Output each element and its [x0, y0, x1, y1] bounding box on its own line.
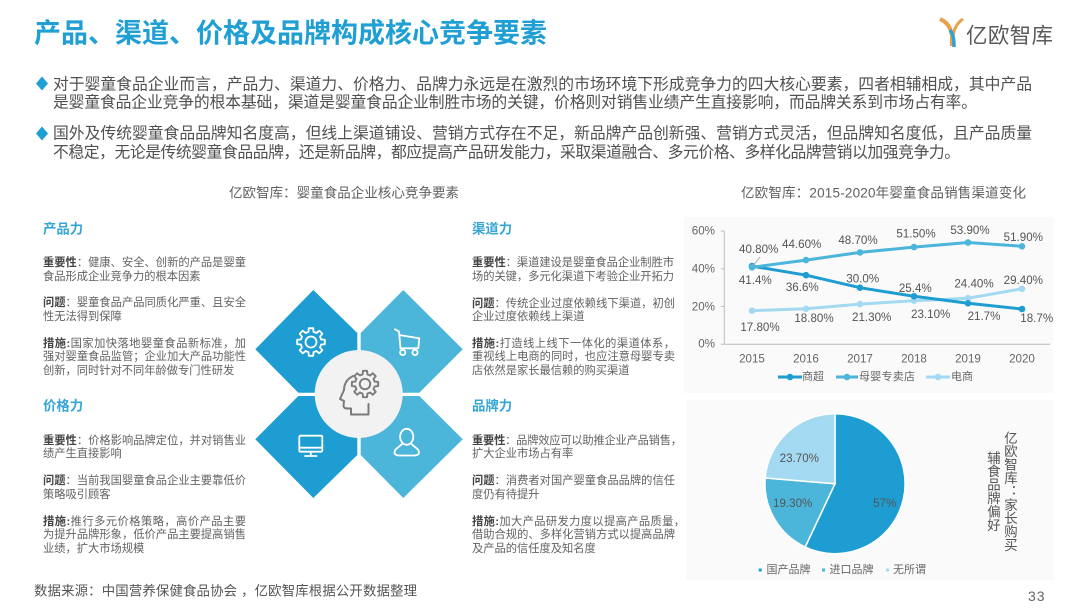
intro paragraph 2: 不稳定，无论是传统婴童食品品牌，还是新品牌，都应提高产品研发能力，采取渠道融合、多元价格、多样化品牌营销以加强竞争力。	[53, 142, 960, 162]
data labels: 51.50%	[896, 228, 936, 240]
icon: person	[394, 429, 419, 456]
x axis labels	[739, 352, 1035, 366]
panel: channel power: 店依然是家长最信赖的购买渠道	[472, 363, 630, 377]
pie legend	[759, 562, 926, 576]
panel: price power: 策略吸引顾客	[43, 487, 111, 501]
data labels: 36.6%	[786, 281, 819, 294]
icon: head with gear	[340, 371, 378, 414]
panel: price power: 绩产生直接影响	[43, 446, 122, 460]
logo	[940, 19, 1053, 48]
logo: 亿欧智库	[966, 24, 1053, 48]
pie chart: brand preference: 57%	[873, 497, 896, 510]
panel: product power: 食品形成企业竞争力的根本因素	[43, 269, 201, 283]
intro paragraph 1	[36, 74, 1032, 112]
data labels: 53.90%	[950, 224, 990, 237]
source note: 数据来源：中国营养保健食品协会 ，亿欧智库根据公开数据整理	[34, 582, 417, 598]
pie chart: brand preference: 19.30%	[773, 497, 812, 510]
y axis labels: 0%	[698, 338, 715, 350]
y axis labels: 60%	[692, 224, 715, 238]
page number: 33	[1028, 588, 1046, 604]
panel: brand power: 品牌力	[472, 398, 512, 414]
icon: shopping cart	[395, 329, 419, 355]
subheading: core factors: 亿欧智库：婴童食品企业核心竞争要素	[229, 184, 459, 200]
title: 产品、渠道、价格及品牌构成核心竞争要素	[34, 18, 547, 48]
x axis labels: 2017	[847, 352, 873, 366]
panel: product power: 措施:国家加快落地婴童食品新标准，加	[43, 336, 246, 350]
diamond: bottom left	[255, 396, 357, 498]
panel: product power: 创新，同时针对不同年龄做专门性研发	[43, 363, 234, 377]
intro paragraph 2	[36, 124, 1032, 162]
subheading: channel change: 亿欧智库：2015-2020年婴童食品销售渠道变化	[741, 184, 1026, 200]
data labels: 18.7%	[1020, 312, 1053, 325]
intro paragraph 1: 对于婴童食品企业而言，产品力、渠道力、价格力、品牌力永远是在激烈的市场环境下形成竞争力的四大核心要素，四者相辅相成，其中产品	[53, 74, 1032, 94]
panel: product power: 产品力	[43, 220, 83, 236]
icon: monitor	[299, 436, 322, 456]
panel: product power: 性无法得到保障	[43, 309, 122, 323]
panel: product power: 重要性：健康、安全、创新的产品是婴童	[43, 255, 246, 269]
intro paragraph 1: 是婴童食品企业竞争的根本基础，渠道是婴童食品企业制胜市场的关键，价格则对销售业绩产生直接影响，而品牌关系到市场占有率。	[53, 92, 977, 112]
data labels: 21.7%	[968, 310, 1000, 323]
x axis labels: 2019	[955, 352, 981, 366]
icon: gear	[297, 328, 325, 356]
panel: channel power: 重视线上电商的同时，也应注意母婴专卖	[472, 349, 675, 363]
data labels: 24.40%	[954, 278, 994, 290]
diamond diagram	[255, 290, 463, 498]
vertical caption: brand preference: 亿欧智库：家长购买	[1002, 431, 1017, 552]
diamond: top right	[361, 290, 463, 393]
line chart legend: 母婴专卖店	[859, 369, 915, 383]
panel: price power: 措施:推行多元价格策略，高价产品主要	[43, 514, 246, 528]
panel: product power	[43, 220, 246, 377]
pie legend: 国产品牌	[766, 562, 810, 576]
panel: product power: 问题：婴童食品产品同质化严重、且安全	[43, 295, 246, 309]
data labels: 48.70%	[838, 234, 878, 247]
x axis labels: 2016	[793, 352, 819, 366]
data labels: 29.40%	[1004, 274, 1043, 287]
vertical caption: brand preference: 辅食品牌偏好	[985, 451, 1000, 532]
data labels: 21.30%	[852, 311, 891, 324]
panel: price power: 问题：当前我国婴童食品企业主要靠低价	[43, 473, 246, 487]
data labels: 40.80%	[739, 243, 778, 256]
center circle	[315, 350, 403, 438]
data labels: 30.0%	[846, 272, 879, 286]
line chart: sales channel change	[684, 217, 1053, 393]
line chart legend	[778, 369, 973, 383]
panel: price power	[43, 398, 246, 555]
panel: price power: 价格力	[43, 398, 83, 414]
line chart legend: 电商	[951, 369, 973, 383]
data labels: 41.4%	[739, 274, 772, 287]
panel: brand power	[472, 398, 685, 555]
data labels: 18.80%	[794, 312, 834, 325]
series: supermarket	[749, 263, 1025, 312]
pie chart: brand preference	[686, 400, 1053, 580]
panel: product power: 强对婴童食品监管；企业加大产品功能性	[43, 349, 246, 363]
pie chart: brand preference: 23.70%	[780, 452, 819, 465]
panel: brand power: 度仍有待提升	[472, 487, 540, 501]
y axis labels: 40%	[692, 262, 715, 276]
pie legend: 无所谓	[893, 563, 926, 576]
vertical caption: brand preference	[985, 431, 1018, 552]
panel: channel power: 重要性：渠道建设是婴童食品企业制胜市	[472, 255, 674, 269]
panel: price power: 为提升品牌形象，低价产品主要提高销售	[43, 527, 246, 541]
data labels: 25.4%	[899, 282, 932, 295]
panel: brand power: 扩大企业市场占有率	[472, 446, 573, 460]
series: maternity store	[749, 239, 1025, 271]
pie legend: 进口品牌	[830, 562, 874, 576]
data labels: 23.10%	[911, 308, 950, 321]
panel: channel power: 企业过度依赖线上渠道	[472, 309, 585, 323]
panel: price power: 重要性：价格影响品牌定位，并对销售业	[43, 433, 246, 447]
panel: price power: 业绩，扩大市场规模	[43, 541, 144, 555]
data labels: 44.60%	[782, 238, 821, 251]
data labels: 17.80%	[740, 321, 780, 334]
data labels	[739, 224, 1053, 334]
diamond: bottom right	[361, 396, 463, 498]
x axis labels: 2020	[1009, 352, 1035, 366]
line chart legend: 商超	[802, 369, 824, 383]
data labels: 51.90%	[1004, 231, 1043, 244]
panel: channel power	[472, 220, 675, 377]
panel: brand power: 措施:加大产品研发力度以提高产品质量，	[472, 514, 685, 528]
diamond: top left	[255, 290, 357, 393]
panel: brand power: 问题：消费者对国产婴童食品品牌的信任	[472, 473, 675, 487]
panel: channel power: 场的关键，多元化渠道下考验企业开拓力	[472, 269, 674, 283]
panel: channel power: 问题：传统企业过度依赖线下渠道，初创	[472, 296, 675, 310]
x axis labels: 2018	[901, 352, 927, 366]
panel: channel power: 措施:打造线上线下一体化的渠道体系，	[472, 336, 675, 350]
series: e-commerce	[749, 286, 1025, 314]
y axis labels: 20%	[692, 300, 715, 314]
x axis labels: 2015	[739, 352, 765, 366]
panel: brand power: 借助合规的、多样化营销方式以提高品牌	[472, 527, 675, 541]
intro paragraph 2: 国外及传统婴童食品品牌知名度高，但线上渠道铺设、营销方式存在不足，新品牌产品创新强、营销方式灵活，但品牌知名度低，且产品质量	[53, 124, 1032, 142]
panel: brand power: 重要性：品牌效应可以助推企业产品销售，	[472, 433, 682, 447]
y axis labels	[692, 224, 715, 350]
panel: channel power: 渠道力	[472, 220, 512, 236]
panel: brand power: 及产品的信任度及知名度	[472, 541, 596, 555]
